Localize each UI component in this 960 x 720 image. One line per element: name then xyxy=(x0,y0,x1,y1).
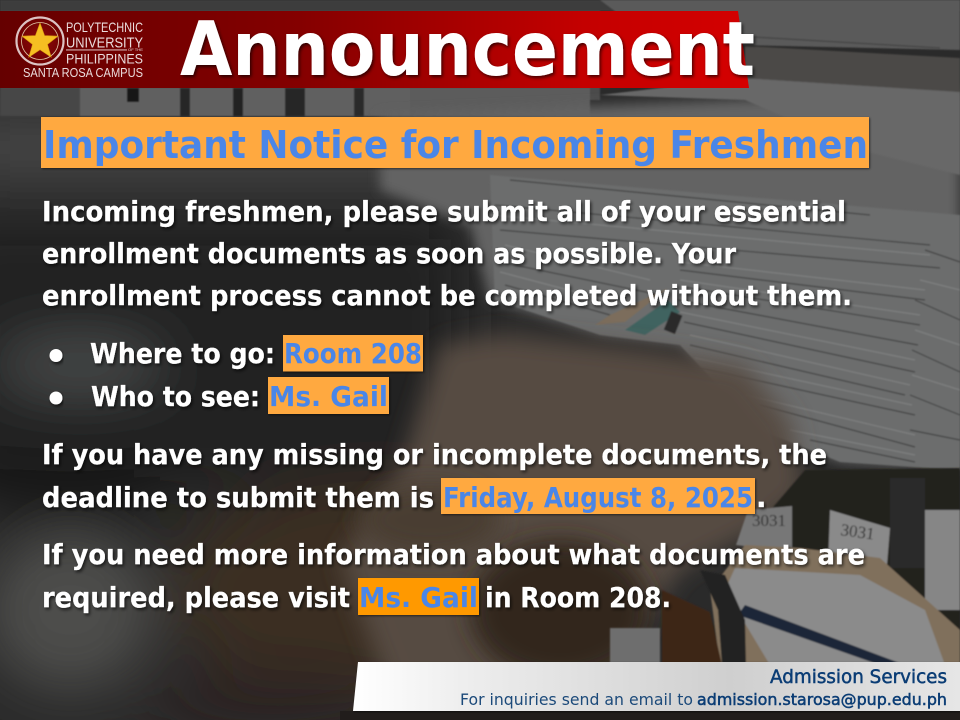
more information paragraph xyxy=(42,539,865,615)
university name: SANTA ROSA CAMPUS xyxy=(23,65,143,80)
blurred brown foreground shape xyxy=(340,335,805,720)
deadline paragraph: deadline to submit them is xyxy=(42,482,434,514)
intro paragraph: Incoming freshmen, please submit all of your essential xyxy=(42,196,846,228)
university name: PHILIPPINES xyxy=(66,50,143,66)
more information paragraph: in Room 208. xyxy=(485,582,671,614)
inquiry line xyxy=(460,690,947,709)
heading: important notice: Important Notice for Incoming Freshmen xyxy=(43,123,868,168)
more information paragraph: Ms. Gail xyxy=(359,582,478,614)
inquiry line: For inquiries send an email to xyxy=(460,690,693,709)
university seal logo xyxy=(16,18,64,64)
lower right shelf and folders xyxy=(610,468,960,665)
folder tag numbers: 3031 xyxy=(839,520,876,544)
paper stacks xyxy=(380,90,960,470)
university name: UNIVERSITY xyxy=(66,34,143,52)
more information paragraph: If you need more information about what documents are xyxy=(42,539,865,571)
intro paragraph: enrollment process cannot be completed without them. xyxy=(42,280,852,312)
department name: Admission Services xyxy=(770,666,947,688)
more information paragraph: required, please visit xyxy=(42,582,350,614)
bullet: who to see: Ms. Gail xyxy=(269,381,388,413)
inquiry line: admission.starosa@pup.edu.ph xyxy=(697,690,947,709)
bullet: where to go: Room 208 xyxy=(284,338,422,370)
lower right shelf and folders: 3031 xyxy=(752,511,786,530)
bullet: who to see: Who to see: xyxy=(91,381,260,413)
intro paragraph: enrollment documents as soon as possible. Your xyxy=(42,238,736,270)
deadline paragraph: Friday, August 8, 2025 xyxy=(443,482,753,514)
deadline paragraph: . xyxy=(756,482,766,514)
university name xyxy=(23,19,144,80)
bullet: where to go xyxy=(50,335,423,372)
bullet: who to see xyxy=(50,377,389,414)
footer contact bar xyxy=(353,662,960,711)
top left binders xyxy=(0,0,960,116)
header banner xyxy=(0,5,755,93)
bullet: where to go: Where to go: xyxy=(90,338,275,370)
deadline paragraph xyxy=(42,439,827,514)
title: Announcement xyxy=(180,5,755,93)
university name: OF THE xyxy=(128,48,144,52)
university name: POLYTECHNIC xyxy=(66,19,143,35)
intro paragraph xyxy=(42,196,852,312)
deadline paragraph: If you have any missing or incomplete documents, the xyxy=(42,439,827,471)
